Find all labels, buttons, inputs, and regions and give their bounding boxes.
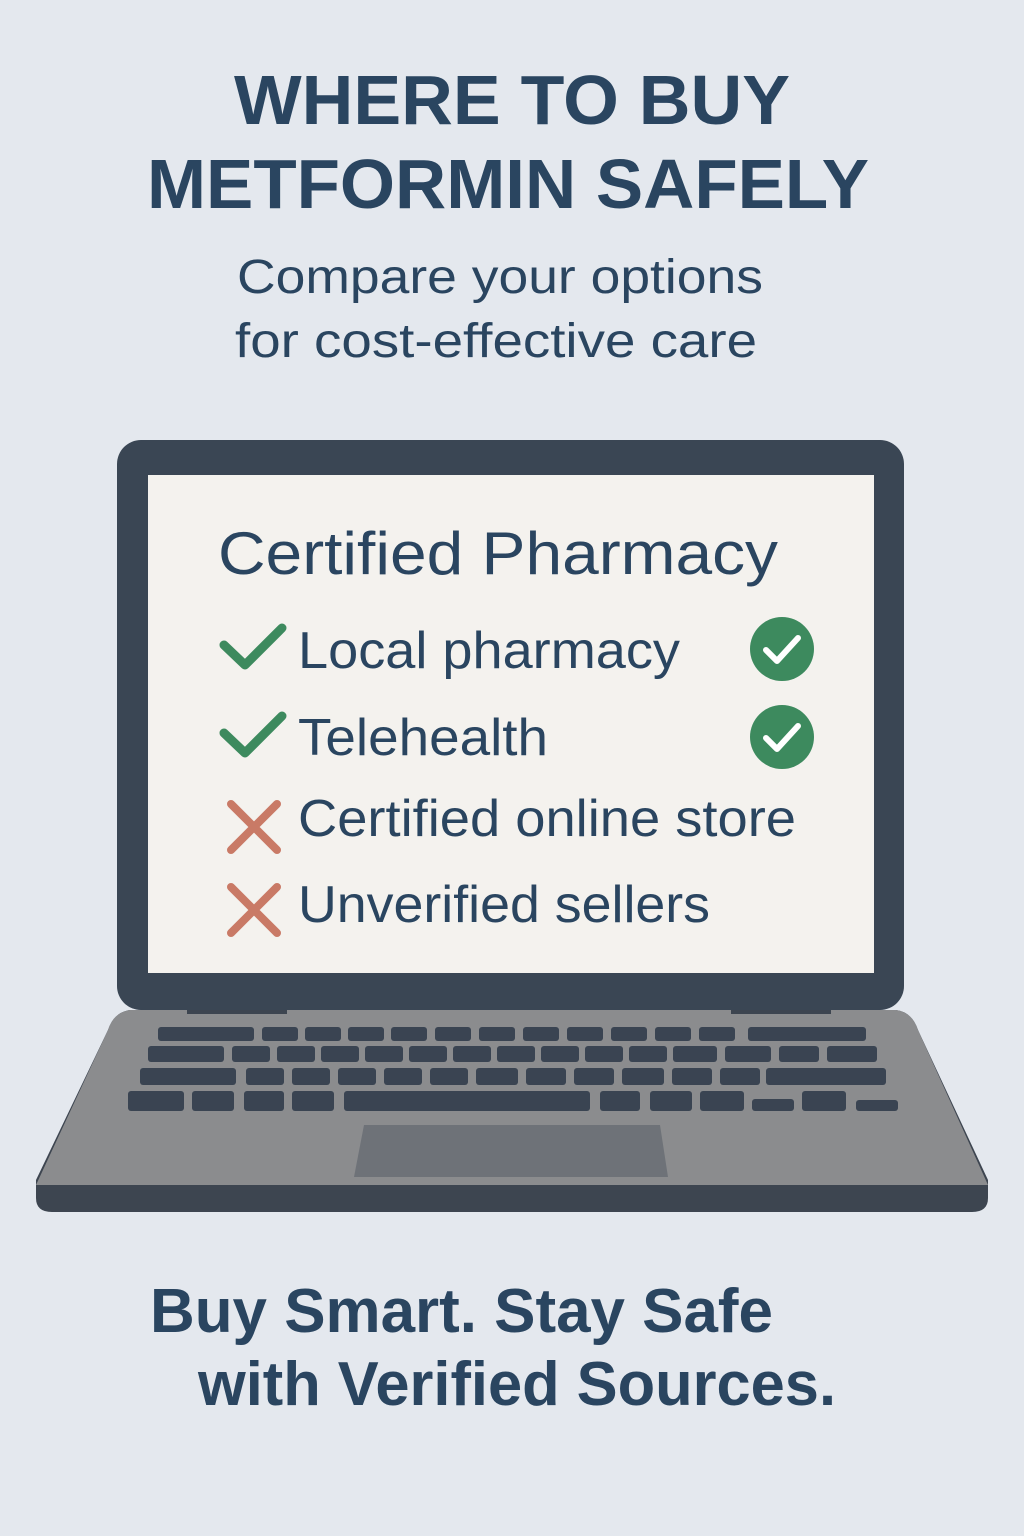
item: certified online store: Certified online store — [298, 790, 796, 848]
item: telehealth: Telehealth — [298, 709, 548, 767]
item: telehealth — [224, 705, 814, 769]
item: unverified sellers: Unverified sellers — [298, 876, 710, 934]
laptop screen — [117, 440, 904, 1010]
screen heading: Certified Pharmacy — [218, 520, 778, 587]
item: local pharmacy: Local pharmacy — [298, 622, 680, 680]
title: WHERE TO BUY — [234, 61, 790, 139]
footer tagline: Buy Smart. Stay Safe — [150, 1277, 773, 1346]
subtitle: for cost-effective care — [235, 315, 757, 368]
title: METFORMIN SAFELY — [147, 145, 869, 223]
item: local pharmacy — [224, 617, 814, 681]
title — [147, 61, 869, 223]
laptop base — [36, 1008, 988, 1212]
subtitle — [235, 251, 763, 368]
footer tagline: with Verified Sources. — [197, 1350, 836, 1419]
trackpad — [354, 1125, 668, 1177]
laptop — [36, 440, 988, 1212]
subtitle: Compare your options — [237, 251, 763, 304]
footer tagline — [150, 1277, 836, 1419]
